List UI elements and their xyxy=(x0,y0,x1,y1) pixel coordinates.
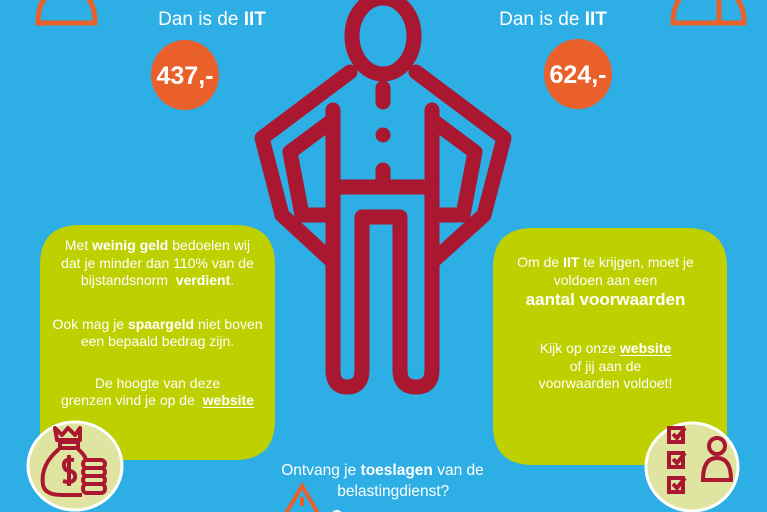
text block: right panel: aantal voorwaarden xyxy=(526,290,685,309)
icon circle right: checklist and person xyxy=(646,423,738,511)
icon: warning triangle xyxy=(282,486,322,512)
amount right: 624,- xyxy=(550,61,606,89)
text block: left panel: Met weinig geld bedoelen wij xyxy=(65,237,250,253)
text block: left panel: bijstandsnorm verdient. xyxy=(81,272,234,288)
icon: top left partial orange xyxy=(38,0,95,23)
figure: person with empty pockets xyxy=(262,0,504,387)
text block: left panel xyxy=(52,237,263,408)
text block: bottom question: Ontvang je toeslagen van de xyxy=(281,462,484,479)
text block: left panel: grenzen vind je op de website xyxy=(61,392,254,408)
text block: left panel: dat je minder dan 110% van de xyxy=(61,254,254,270)
text block: right panel: Kijk op onze website xyxy=(540,340,671,356)
number circle right xyxy=(544,39,612,109)
text block: right panel: voldoen aan een xyxy=(554,272,657,288)
panel: right green box xyxy=(493,228,727,465)
text block: left panel: De hoogte van deze xyxy=(95,374,220,390)
text block: left panel: een bepaald bedrag zijn. xyxy=(81,333,234,349)
text block: right panel: voorwaarden voldoet! xyxy=(539,375,672,391)
text block: right panel xyxy=(517,254,694,391)
heading left: Dan is de IIT: Dan is de IIT xyxy=(158,9,266,30)
heading right: Dan is de IIT: Dan is de IIT xyxy=(499,9,607,30)
decorative partial circle xyxy=(331,510,343,512)
text block: bottom question: belastingdienst? xyxy=(337,483,449,500)
text block: bottom question xyxy=(281,462,484,500)
text block: left panel: Ook mag je spaargeld niet boven xyxy=(52,316,263,332)
figure button xyxy=(376,128,390,142)
panel: left green box xyxy=(40,225,275,460)
icon circle left: money bag xyxy=(28,422,122,510)
text block: right panel: Om de IIT te krijgen, moet je xyxy=(517,254,694,270)
icon: top right partial orange xyxy=(673,0,744,23)
text block: right panel: of jij aan de xyxy=(570,358,641,374)
number circle left xyxy=(151,40,219,110)
amount left: 437,- xyxy=(156,62,213,90)
